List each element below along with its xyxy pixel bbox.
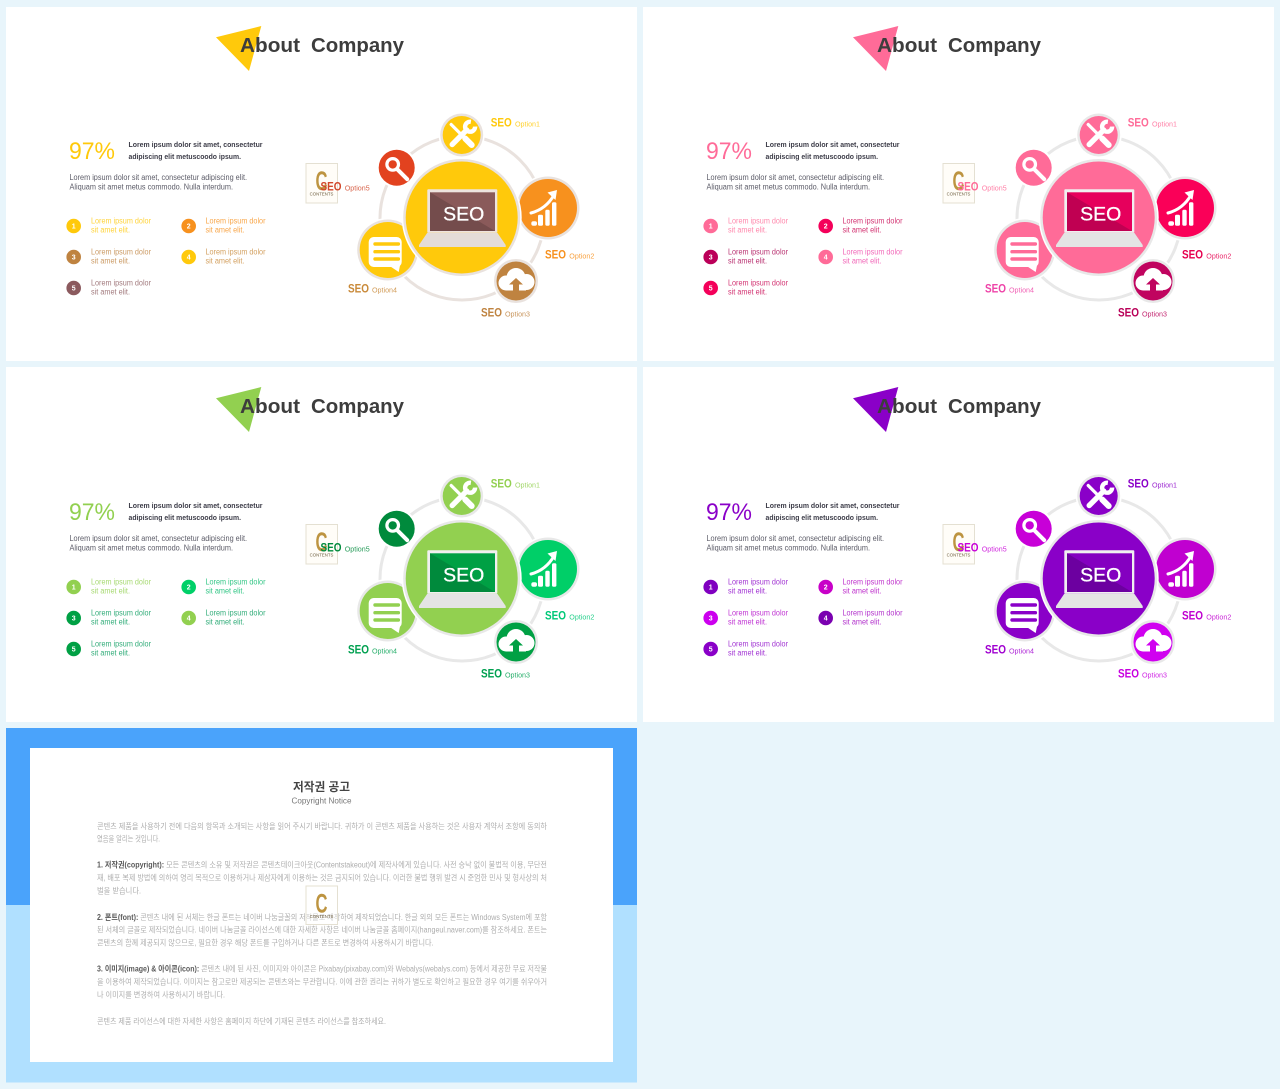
numbered list: Lorem ipsum dolor bbox=[91, 278, 151, 288]
notice section 1: copyright: 벌을 받습니다. bbox=[97, 886, 141, 896]
center circle with laptop: SEO bbox=[443, 564, 484, 586]
numbered list: sit amet elit. bbox=[728, 649, 767, 658]
numbered list: sit amet elit. bbox=[728, 288, 767, 297]
label: option 3: SEO bbox=[481, 308, 502, 320]
title: Company bbox=[948, 35, 1042, 57]
numbered list: 4 bbox=[824, 254, 828, 262]
node: option 1 tools bbox=[440, 114, 483, 156]
body text: Aliquam sit amet metus commodo. Nulla interdum. bbox=[706, 182, 870, 192]
title bbox=[240, 396, 405, 418]
logo watermark bbox=[943, 524, 974, 564]
label: option 3: SEO bbox=[481, 669, 502, 681]
body text: Lorem ipsum dolor sit amet, consectetur adipiscing elit. bbox=[706, 173, 884, 182]
numbered list: sit amet elit. bbox=[206, 618, 244, 627]
stat description bbox=[766, 140, 900, 161]
body text: Lorem ipsum dolor sit amet, consectetur adipiscing elit. bbox=[706, 534, 884, 543]
notice section 3: image and icon bbox=[97, 964, 547, 1000]
label: option 2: SEO bbox=[1182, 249, 1203, 261]
center circle with laptop bbox=[403, 520, 520, 637]
label: option 3: Option3 bbox=[505, 671, 530, 680]
node: option 1 tools bbox=[440, 474, 483, 518]
label: option 3: Option3 bbox=[505, 310, 530, 319]
label: option 1 bbox=[491, 479, 540, 491]
SEO diagram bbox=[320, 474, 594, 681]
numbered list: sit amet elit. bbox=[91, 226, 130, 235]
numbered list: 2 bbox=[187, 584, 191, 592]
numbered list: 4 bbox=[187, 616, 191, 622]
label: option 4: Option4 bbox=[372, 285, 397, 294]
numbered list: Lorem ipsum dolor bbox=[842, 608, 903, 618]
numbered list: 4 bbox=[187, 254, 191, 262]
label: option 5: SEO bbox=[958, 543, 979, 555]
node: option 3 cloud bbox=[494, 259, 538, 303]
logo watermark bbox=[306, 164, 338, 203]
panel: yellow about company bbox=[6, 7, 637, 361]
numbered list: 1 bbox=[709, 584, 713, 592]
notice section 3: image and icon: 3. 이미지(image) & 아이콘(icon): 콘텐츠 내에 된 사진, 이미지와 아이콘은 Pixabay(pixabay.com)와 Webalys(webalys.com) 등에서 제공한 무료 저작물 bbox=[97, 964, 547, 974]
body text: Lorem ipsum dolor sit amet, consectetur adipiscing elit. bbox=[70, 534, 247, 543]
logo watermark bbox=[306, 886, 338, 924]
node: option 4 speech bubble bbox=[357, 580, 418, 642]
numbered list: Lorem ipsum dolor bbox=[91, 216, 151, 226]
numbered list: 3 bbox=[709, 616, 713, 622]
title: About bbox=[877, 396, 937, 418]
label: option 2: Option2 bbox=[569, 251, 594, 260]
numbered list: sit amet elit. bbox=[91, 649, 130, 658]
logo watermark: C bbox=[316, 888, 328, 918]
notice section 3: image and icon: 나 이미지를 변경하여 사용하시기 바랍니다. bbox=[97, 990, 225, 1000]
numbered list: Lorem ipsum dolor bbox=[728, 578, 788, 586]
title: About bbox=[240, 396, 300, 418]
label: option 3: SEO bbox=[1118, 669, 1139, 681]
label: option 4 bbox=[985, 283, 1034, 295]
stat description bbox=[128, 501, 263, 522]
node: option 2 graph bbox=[1154, 538, 1216, 600]
numbered list: sit amet elit. bbox=[206, 226, 244, 235]
numbered list: 2 bbox=[824, 224, 828, 230]
title accent triangle bbox=[853, 387, 898, 432]
center circle with laptop bbox=[403, 159, 520, 276]
title accent triangle bbox=[216, 387, 261, 432]
numbered list: Lorem ipsum dolor bbox=[728, 248, 788, 256]
numbered list: Lorem ipsum dolor bbox=[728, 608, 788, 618]
numbered list: 1 bbox=[709, 224, 713, 230]
panel: purple about company bbox=[643, 367, 1274, 722]
label: option 3: SEO bbox=[1118, 308, 1139, 320]
notice section 3: image and icon: 을 이용하여 제작되었습니다. 이미지는 참고로만 제공되는 콘텐츠와는 무관합니다. 이에 관한 권리는 귀하가 별도로 확인하고 필요한 경우 여기를 쉬우아거 bbox=[97, 976, 547, 986]
label: option 2: Option2 bbox=[1206, 251, 1231, 260]
body text bbox=[706, 173, 884, 192]
title bbox=[240, 35, 405, 57]
node: option 5 magnifier bbox=[1014, 148, 1054, 188]
label: option 5 bbox=[958, 543, 1007, 555]
label: option 2: SEO bbox=[1182, 610, 1203, 622]
notice intro: 였음을 알리는 것입니다. bbox=[97, 834, 160, 844]
label: option 1: SEO bbox=[1128, 479, 1149, 491]
numbered list: 2 bbox=[824, 584, 828, 592]
logo watermark: CONTENTS bbox=[947, 552, 970, 558]
SEO diagram bbox=[958, 114, 1231, 320]
numbered list: sit amet elit. bbox=[842, 257, 882, 266]
title accent triangle bbox=[216, 26, 261, 71]
node: option 2 graph bbox=[1154, 176, 1216, 240]
numbered list: 5 bbox=[72, 646, 76, 654]
body text: Lorem ipsum dolor sit amet, consectetur adipiscing elit. bbox=[70, 173, 247, 182]
notice section 2: font: 2. 폰트(font): 콘텐츠 내에 된 서체는 한글 폰트는 네이버 나눔글꼴의 저작물로 제작하여 제작되었습니다. 한글 외의 모든 폰트는 Windows System에 포함 bbox=[97, 912, 548, 922]
numbered list: 3 bbox=[72, 254, 76, 262]
logo watermark: CONTENTS bbox=[310, 192, 333, 196]
panel: pink about company bbox=[643, 7, 1274, 361]
label: option 5: Option5 bbox=[982, 545, 1007, 554]
body text: Aliquam sit amet metus commodo. Nulla interdum. bbox=[70, 544, 233, 552]
label: option 4 bbox=[985, 644, 1034, 656]
numbered list bbox=[66, 216, 266, 297]
label: option 5: SEO bbox=[320, 543, 342, 555]
label: option 3: Option3 bbox=[1142, 310, 1167, 319]
label: option 4: SEO bbox=[985, 283, 1006, 295]
numbered list bbox=[703, 578, 903, 658]
center circle with laptop bbox=[1040, 520, 1157, 637]
numbered list: sit amet elit. bbox=[91, 618, 130, 627]
notice intro bbox=[97, 821, 548, 844]
logo watermark: CONTENTS bbox=[947, 192, 970, 196]
label: option 5: SEO bbox=[958, 182, 979, 194]
label: option 5: SEO bbox=[320, 182, 342, 194]
label: option 1 bbox=[491, 118, 540, 130]
title: About bbox=[240, 35, 300, 57]
body text: Aliquam sit amet metus commodo. Nulla interdum. bbox=[706, 544, 870, 552]
label: option 5: Option5 bbox=[345, 184, 370, 193]
stat description: adipiscing elit metuscoodo ipsum. bbox=[128, 513, 241, 522]
numbered list: Lorem ipsum dolor bbox=[91, 608, 151, 618]
label: option 5: Option5 bbox=[345, 545, 370, 554]
node: option 3 cloud bbox=[494, 620, 538, 664]
label: option 2 bbox=[545, 249, 594, 261]
title bbox=[877, 35, 1042, 57]
logo watermark: CONTENTS bbox=[310, 552, 333, 558]
node: option 2 graph bbox=[516, 538, 580, 600]
label: option 1: Option1 bbox=[1152, 481, 1177, 490]
body text: Aliquam sit amet metus commodo. Nulla interdum. bbox=[70, 182, 233, 192]
label: option 3 bbox=[481, 669, 530, 681]
stat 97%: 97% bbox=[69, 499, 115, 526]
node: option 3 cloud bbox=[1131, 259, 1175, 303]
logo watermark: C bbox=[316, 527, 328, 557]
logo watermark: C bbox=[952, 527, 964, 557]
node: option 4 speech bubble bbox=[357, 220, 418, 280]
notice section 2: font bbox=[97, 912, 548, 948]
label: option 5 bbox=[958, 182, 1007, 194]
node: option 1 tools bbox=[1077, 474, 1120, 518]
stat description: adipiscing elit metuscoodo ipsum. bbox=[766, 152, 878, 161]
numbered list: sit amet elit. bbox=[728, 257, 767, 266]
label: option 2: Option2 bbox=[1206, 612, 1231, 621]
center circle with laptop bbox=[1040, 159, 1157, 276]
stat 97%: 97% bbox=[69, 138, 115, 165]
stat 97%: 97% bbox=[706, 499, 752, 526]
numbered list: 5 bbox=[709, 646, 713, 654]
label: option 1: SEO bbox=[1128, 118, 1149, 130]
stat description: Lorem ipsum dolor sit amet, consectetur bbox=[766, 501, 900, 510]
numbered list: Lorem ipsum dolor bbox=[842, 578, 903, 586]
label: option 1 bbox=[1128, 479, 1177, 491]
stat description bbox=[766, 501, 900, 522]
stat description: adipiscing elit metuscoodo ipsum. bbox=[766, 513, 878, 522]
numbered list: 5 bbox=[72, 286, 76, 292]
node: option 4 speech bubble bbox=[994, 220, 1055, 280]
label: option 3 bbox=[1118, 308, 1167, 320]
label: option 2 bbox=[1182, 610, 1231, 622]
numbered list: Lorem ipsum dolor bbox=[206, 248, 266, 256]
label: option 4: Option4 bbox=[1009, 646, 1034, 655]
label: option 4: SEO bbox=[985, 644, 1006, 656]
node: option 5 magnifier bbox=[1014, 509, 1054, 549]
numbered list: sit amet elit. bbox=[842, 226, 882, 235]
numbered list: 1 bbox=[72, 224, 76, 230]
notice section 1: copyright: 1. 저작권(copyright): 모든 콘텐츠의 소유 및 저작권은 콘텐츠테이크아웃(Contentstakeout)에 제작사에게 있습니다. 사전 승낙 없이 불법적 이용, 무단전 bbox=[97, 860, 547, 870]
title: About bbox=[877, 35, 937, 57]
panel: green about company bbox=[6, 367, 637, 722]
notice section 1: copyright bbox=[97, 860, 547, 896]
label: option 2 bbox=[545, 610, 594, 622]
label: option 1: SEO bbox=[491, 479, 512, 491]
numbered list: sit amet elit. bbox=[842, 587, 882, 596]
label: option 4: SEO bbox=[348, 644, 369, 656]
center circle with laptop: SEO bbox=[1080, 204, 1121, 226]
numbered list: 1 bbox=[72, 584, 76, 592]
center circle with laptop: SEO bbox=[1080, 564, 1121, 586]
numbered list: 3 bbox=[709, 254, 713, 262]
stat description: adipiscing elit metuscoodo ipsum. bbox=[128, 152, 241, 161]
numbered list: sit amet elit. bbox=[91, 257, 130, 266]
numbered list: Lorem ipsum dolor bbox=[206, 216, 266, 226]
label: option 4: Option4 bbox=[1009, 285, 1034, 294]
label: option 4 bbox=[348, 644, 397, 656]
numbered list bbox=[703, 216, 903, 297]
title accent triangle bbox=[853, 26, 898, 71]
label: option 3 bbox=[481, 308, 530, 320]
numbered list: Lorem ipsum dolor bbox=[91, 640, 151, 648]
numbered list: Lorem ipsum dolor bbox=[842, 216, 903, 226]
numbered list: 4 bbox=[824, 616, 828, 622]
numbered list: sit amet elit. bbox=[91, 587, 130, 596]
label: option 3 bbox=[1118, 669, 1167, 681]
label: option 4: SEO bbox=[348, 283, 369, 295]
label: option 5 bbox=[320, 182, 370, 194]
notice footer line: 콘텐츠 제품 라이선스에 대한 자세한 사항은 홈페이지 하단에 기재된 콘텐츠 라이선스를 참조하세요. bbox=[97, 1016, 386, 1026]
SEO diagram bbox=[958, 474, 1231, 681]
numbered list: 5 bbox=[709, 286, 713, 292]
logo watermark: CONTENTS bbox=[310, 914, 333, 919]
notice intro: 콘텐츠 제품을 사용하기 전에 다음의 항목과 소개되는 사항을 읽어 주시기 바랍니다. 귀하가 이 콘텐츠 제품을 사용하는 것은 사용자 계약서 조항에 동의하 bbox=[97, 821, 548, 831]
numbered list: sit amet elit. bbox=[206, 257, 244, 266]
notice section 2: font: 콘텐츠의 함께 제공되지 않으므로, 필요한 경우 해당 폰트를 구입하거나 다른 폰트로 변경하여 사용하시기 바랍니다. bbox=[97, 938, 434, 948]
stat description bbox=[128, 140, 263, 161]
numbered list: sit amet elit. bbox=[91, 288, 130, 297]
stat 97%: 97% bbox=[706, 138, 752, 165]
label: option 1: Option1 bbox=[515, 481, 540, 490]
notice section 1: copyright: 재, 배포 복제 방법에 의하여 영리 목적으로 이용하거나 제삼자에게 이용하는 것은 금지되어 있습니다. 이러한 불법 행위 발견 시 준엄한 민사 및 형사상의 처 bbox=[97, 872, 547, 882]
logo watermark: C bbox=[952, 166, 964, 196]
numbered list: sit amet elit. bbox=[206, 587, 244, 596]
node: option 3 cloud bbox=[1131, 620, 1175, 664]
panel: copyright notice bbox=[6, 728, 637, 1082]
label: option 2: Option2 bbox=[569, 612, 594, 621]
numbered list: Lorem ipsum dolor bbox=[91, 248, 151, 256]
numbered list: Lorem ipsum dolor bbox=[842, 248, 903, 256]
numbered list: Lorem ipsum dolor bbox=[728, 216, 788, 226]
notice heading: 저작권 공고 bbox=[293, 779, 350, 794]
title bbox=[877, 396, 1042, 418]
label: option 1 bbox=[1128, 118, 1177, 130]
label: option 4 bbox=[348, 283, 397, 295]
label: option 5: Option5 bbox=[982, 184, 1007, 193]
center circle with laptop: SEO bbox=[443, 204, 484, 226]
body text bbox=[706, 534, 884, 552]
label: option 2 bbox=[1182, 249, 1231, 261]
node: option 1 tools bbox=[1077, 114, 1120, 156]
title: Company bbox=[311, 396, 405, 418]
node: option 4 speech bubble bbox=[994, 580, 1055, 642]
logo watermark bbox=[306, 524, 338, 564]
body text bbox=[70, 173, 247, 192]
numbered list: Lorem ipsum dolor bbox=[728, 278, 788, 288]
node: option 5 magnifier bbox=[377, 148, 417, 188]
title: Company bbox=[311, 35, 405, 57]
numbered list: Lorem ipsum dolor bbox=[728, 640, 788, 648]
title: Company bbox=[948, 396, 1042, 418]
label: option 2: SEO bbox=[545, 610, 566, 622]
numbered list: sit amet elit. bbox=[842, 618, 882, 627]
numbered list: sit amet elit. bbox=[728, 226, 767, 235]
numbered list: sit amet elit. bbox=[728, 618, 767, 627]
numbered list bbox=[66, 578, 266, 658]
numbered list: Lorem ipsum dolor bbox=[91, 578, 151, 586]
numbered list: Lorem ipsum dolor bbox=[206, 608, 266, 618]
label: option 1: SEO bbox=[491, 118, 512, 130]
label: option 3: Option3 bbox=[1142, 671, 1167, 680]
stat description: Lorem ipsum dolor sit amet, consectetur bbox=[128, 501, 263, 510]
node: option 2 graph bbox=[516, 176, 580, 240]
label: option 4: Option4 bbox=[372, 646, 397, 655]
SEO diagram bbox=[320, 114, 594, 320]
numbered list: 3 bbox=[72, 616, 76, 622]
stat description: Lorem ipsum dolor sit amet, consectetur bbox=[128, 140, 263, 149]
label: option 5 bbox=[320, 543, 370, 555]
numbered list: Lorem ipsum dolor bbox=[206, 578, 266, 586]
numbered list: sit amet elit. bbox=[728, 587, 767, 596]
stat description: Lorem ipsum dolor sit amet, consectetur bbox=[766, 140, 900, 149]
label: option 1: Option1 bbox=[1152, 120, 1177, 129]
notice subheading: Copyright Notice bbox=[292, 796, 352, 806]
notice section 2: font: 된 서체의 글꼴로 제작되었습니다. 네이버 나눔글꼴 라이선스에 대한 자세한 사항은 네이버 나눔글꼴 홈페이지(hangeul.naver.com)를 참조하세요. 폰트는 bbox=[97, 924, 547, 934]
logo watermark bbox=[943, 164, 974, 203]
body text bbox=[70, 534, 247, 552]
node: option 5 magnifier bbox=[377, 509, 417, 549]
label: option 2: SEO bbox=[545, 249, 566, 261]
numbered list: 2 bbox=[187, 224, 191, 230]
logo watermark: C bbox=[316, 166, 328, 196]
label: option 1: Option1 bbox=[515, 120, 540, 129]
